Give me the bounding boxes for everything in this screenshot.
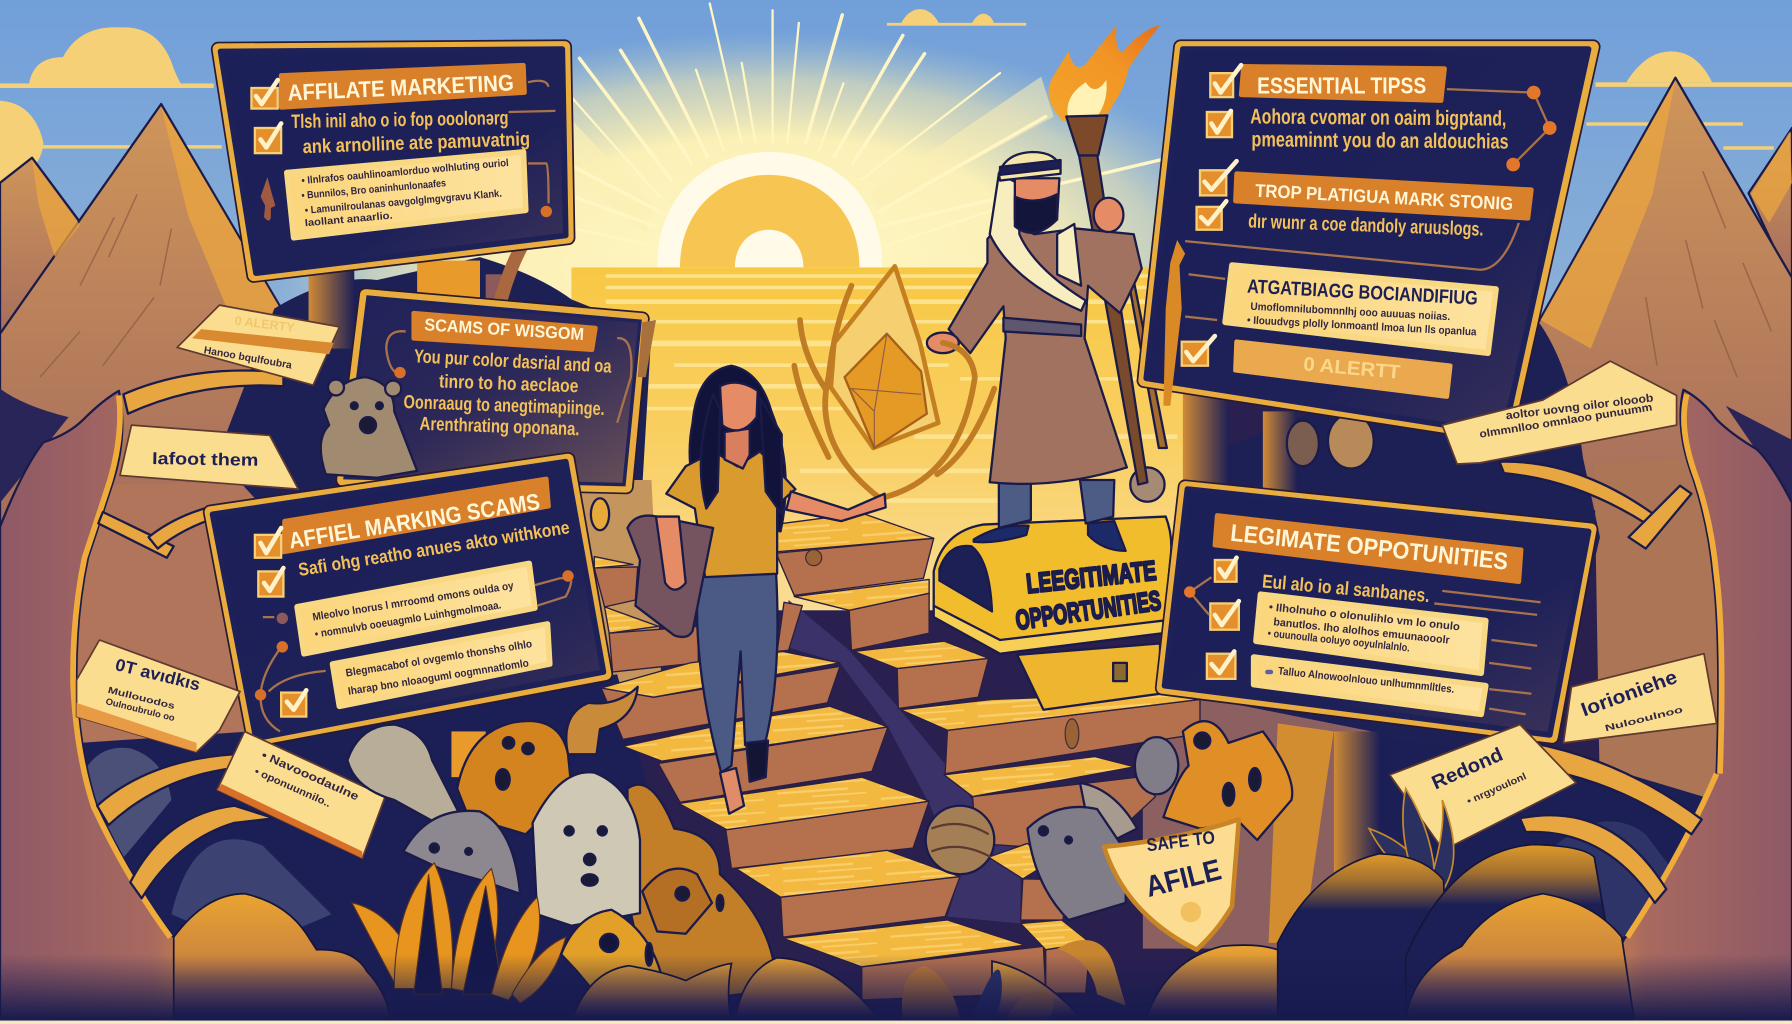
panel: essential tips — [1144, 47, 1593, 437]
gem — [845, 334, 927, 448]
paper label: right note: aoltor uovng oilor olooob — [1505, 392, 1654, 422]
note box: Iaollant anaarlio. — [304, 211, 393, 229]
note box one: banutlos. Iho alolhos emuunaooolr — [1273, 616, 1451, 647]
strategy box: Umoflomnilubomnnlhj ooo auuuas noiias. — [1250, 301, 1450, 323]
note box one: • ouunoulla ooluyo ooyulnlalnlo. — [1267, 628, 1410, 654]
paper label: left note — [120, 425, 298, 489]
shield: safe to afile: SAFE TO — [1145, 826, 1216, 855]
gem kite with branches — [794, 266, 994, 498]
torso — [666, 451, 795, 577]
tips text — [1250, 105, 1509, 154]
orange beast — [457, 721, 571, 834]
chest label: LEEGITIMATE — [1025, 555, 1158, 599]
heading band — [414, 313, 595, 350]
grey creature — [403, 811, 520, 894]
plant: left leaves — [352, 863, 566, 1003]
shield: safe to afile: AFILE — [1142, 853, 1225, 904]
paper label: lower left — [217, 731, 385, 858]
sub text: dır wunr a coe dandoly aruuslogs. — [1248, 210, 1484, 241]
panel: affiliate marketing scams: AFFIEL MARKING SCAMS — [287, 488, 542, 554]
panel: essential tips: ESSENTIAL TIPSS — [1257, 73, 1426, 99]
note box — [287, 152, 526, 238]
hair sides — [701, 394, 782, 514]
horned tail — [566, 687, 638, 754]
panel: essential tips: TROP PLATIGUA MARK STONIG — [1255, 180, 1514, 214]
note box one: • Ilholnuho o olonulihlo vm lo onulo — [1268, 601, 1461, 633]
paper label: redond: Redond — [1429, 744, 1506, 794]
panel: legitimate opportunities — [1162, 487, 1591, 737]
note box two: Blegmacabof ol ovgemlo thonshs olhlo — [345, 638, 533, 680]
animals: right group — [1027, 721, 1292, 920]
paper label: left avoid: Oulnoubrulo oo — [105, 696, 176, 723]
note box two — [333, 624, 550, 706]
branches — [794, 286, 994, 498]
panel: scams of wisdom — [343, 295, 656, 487]
torch staff and disc — [1079, 154, 1167, 502]
strategy box: • Ilouudvgs plolly lonmoantl lmoa lun lls opanlua — [1247, 314, 1478, 338]
character: woman with bag — [627, 366, 886, 814]
checkboxes — [1182, 65, 1241, 366]
strategy box — [1225, 265, 1496, 353]
note box one: • nomnulvb ooeuagmlo Luinhgmolmoaa. — [314, 599, 502, 641]
paper label: redond: • nrgyoulonl — [1465, 771, 1529, 807]
paper label: lower left: • Navooodaulne — [259, 749, 360, 803]
torch decoration — [638, 320, 656, 377]
hair back — [690, 366, 786, 531]
character: guide with torch — [927, 25, 1167, 551]
desert sand — [571, 267, 1211, 610]
alert band: 0 ALERTT — [1302, 353, 1401, 384]
paper label: left avoid — [77, 640, 240, 752]
legs — [999, 480, 1031, 528]
face and neck — [725, 429, 750, 469]
paper label: redond — [1390, 725, 1576, 850]
treasure chest — [934, 517, 1171, 710]
animals: left group — [347, 687, 776, 1006]
panel: affiliate marketing scams — [210, 459, 606, 741]
jeans — [697, 571, 778, 773]
face and beard — [1015, 178, 1059, 228]
foreground bushes — [174, 845, 1634, 1024]
orange octopus — [1163, 721, 1292, 840]
paper label: alert left: Hanoo bqulfoubra — [203, 345, 293, 372]
sign posts — [309, 219, 1379, 903]
bottom shadow — [0, 954, 1792, 1021]
skull bear — [642, 869, 712, 934]
shield: safe to afile — [1104, 819, 1239, 950]
arm — [786, 491, 886, 521]
note box: • Ilnlrafos oauhlinoamlorduo wolhluting ouriol — [301, 158, 509, 187]
note box one: Mleolvo lnorus l mrroomd omons oulda oy — [312, 580, 515, 624]
wooden branches — [97, 370, 1702, 903]
intro text — [291, 107, 530, 158]
heading band — [1241, 66, 1445, 101]
seed nut — [926, 806, 994, 874]
panel: legitimate opportunities: LEGIMATE OPPOTUNITIES — [1229, 520, 1509, 576]
wooden staircase — [594, 513, 1200, 1000]
heading band — [283, 479, 549, 552]
paper label: right side: Iorioniehe — [1578, 666, 1680, 721]
note box two: Iharap bno nloaoguml oogmnnatlomlo — [347, 657, 530, 698]
paper label: left note: Iafoot them — [152, 448, 259, 470]
body text: You pur color dasrial and oa — [414, 345, 612, 377]
paper label: left avoid: 0Т avıdkıs — [113, 654, 202, 695]
grey animal — [1080, 783, 1137, 840]
strategy box: ATGATBIAGG BOCIANDIFIUG — [1247, 276, 1478, 310]
round pod — [561, 910, 663, 992]
robe — [949, 227, 1142, 484]
panel: affiliate marketing: AFFILATE MARKETING — [287, 69, 514, 106]
tips text: pmeaminnt you do an aldouchias — [1251, 128, 1509, 154]
note box two — [1254, 657, 1486, 714]
trunk highlights — [73, 394, 1722, 937]
note box two: Talluo Alnowoolnlouo unlhumnmlltles. — [1277, 665, 1455, 696]
body text: Oonraaug to anegtimapiinge. — [403, 391, 605, 419]
animal: bear — [321, 377, 417, 478]
paper label: alert left: 0 ALERTY — [234, 314, 296, 335]
flame branch — [1163, 240, 1185, 406]
orange mound — [627, 785, 776, 1006]
body text: tinro to ho aeclaoe — [439, 370, 579, 396]
heading band — [1215, 515, 1521, 582]
intro text: Tlsh inil aho o io fop ooolonərg — [291, 107, 509, 133]
mountain lit slopes — [32, 80, 1792, 349]
intro text: Safi ohg reatho anues akto withkone — [297, 516, 571, 580]
scarf — [990, 174, 1086, 311]
checkboxes — [1207, 558, 1239, 679]
big bear — [533, 772, 640, 926]
paper label: alert left — [177, 305, 339, 385]
paper label: right note — [1442, 361, 1677, 464]
hands — [1094, 198, 1123, 232]
shoes — [746, 741, 768, 782]
paper label: right note: olmmnlloo omnlaoo punuumm — [1479, 401, 1653, 441]
tips text: Aohora cvomar on oaim bigptand, — [1250, 105, 1506, 131]
stair shadow gap — [786, 600, 1021, 923]
headband — [999, 152, 1061, 181]
heading band — [281, 65, 525, 107]
checkboxes — [255, 528, 306, 717]
network nodes — [1447, 86, 1557, 171]
alert band — [1235, 342, 1450, 397]
mountain ridges — [40, 171, 1771, 377]
body text: Arenthrating oponana. — [419, 413, 580, 439]
second heading band — [1235, 174, 1531, 218]
checkboxes — [251, 80, 281, 153]
grey bear top — [347, 725, 459, 825]
panel: affiliate marketing — [218, 47, 568, 275]
intro text: ank arnolline ate pamuvatnig — [302, 128, 530, 158]
note box: • Bunnilos, Bro oaninhunlonaafes — [301, 178, 447, 202]
grey disc — [1135, 737, 1178, 794]
background: sky — [0, 0, 1792, 354]
note box one — [297, 563, 535, 654]
note box one — [1256, 594, 1486, 673]
paper label: left avoid: Mullouodos — [107, 685, 176, 711]
sun rays — [571, 3, 1160, 246]
plant: right leaves — [1369, 789, 1454, 891]
paper label: right side — [1563, 654, 1717, 743]
pin icon — [261, 177, 275, 221]
chest label: OPPORTUNITIES — [1014, 585, 1163, 636]
navy and tan backdrops — [0, 257, 1792, 1021]
foreground leaves — [902, 940, 1126, 1021]
mountains — [0, 78, 1792, 537]
clouds — [0, 9, 1792, 185]
coins — [591, 414, 1374, 530]
note box: • Lamunilroulanas oavgolglmgvgravu Klank. — [304, 189, 502, 217]
intro text: Eul alo io al sanbanes. — [1261, 570, 1431, 606]
paper label: lower left: • oponuunnilo.. — [252, 766, 332, 810]
flame — [1049, 25, 1160, 121]
paper label: right side: Nulooulnoo — [1604, 704, 1684, 733]
stair steps — [594, 513, 1200, 1000]
chest label — [1014, 555, 1163, 636]
panel: scams of wisdom: SCAMS OF WISGOM — [424, 314, 585, 344]
curved trunks — [0, 390, 1792, 1024]
bottom edge strip — [0, 1021, 1792, 1024]
body text — [403, 345, 612, 439]
sun — [657, 152, 882, 267]
bag — [627, 516, 713, 637]
